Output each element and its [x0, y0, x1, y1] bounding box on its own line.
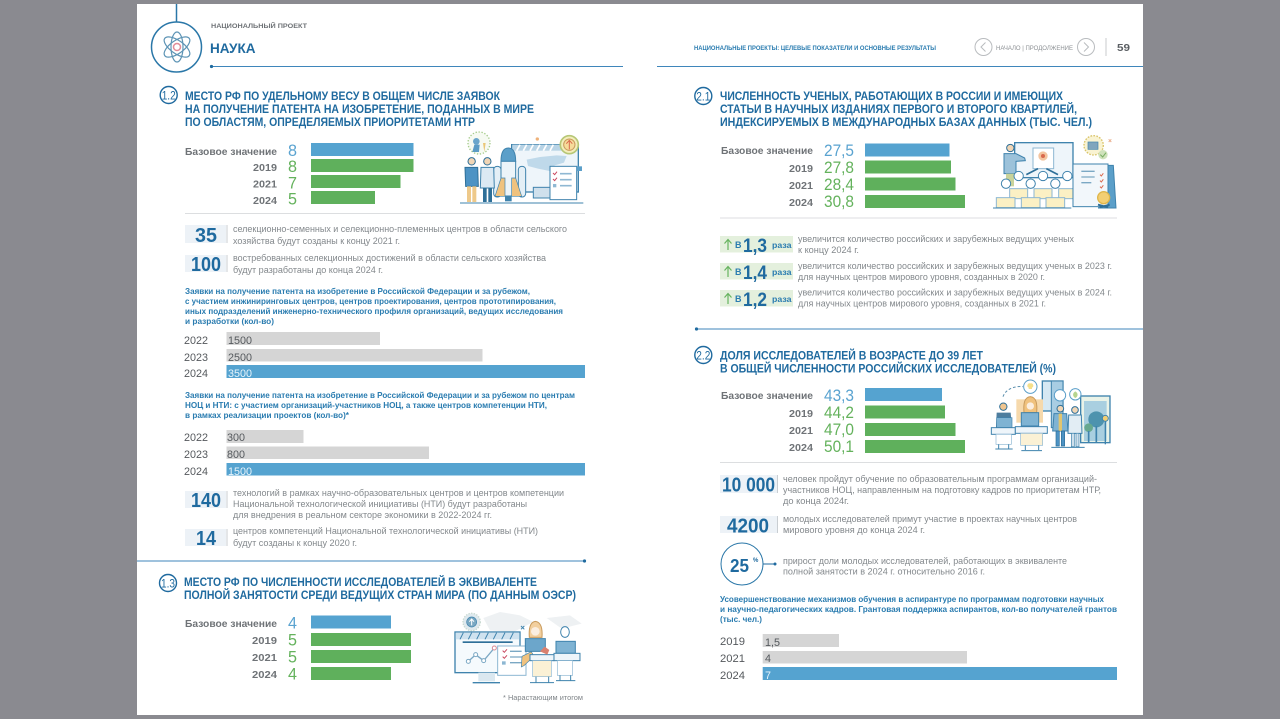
- bar chart: НОЦ and НТИ applications: 1500: [228, 466, 252, 478]
- bar chart: НОЦ and НТИ applications: 2023: [184, 449, 208, 461]
- chart heading: НОЦ and НТИ applications: НОЦ и НТИ: с участием организаций-участников НОЦ, а также центров компетенции НТИ,: [185, 400, 547, 410]
- callout: 35 centers: хозяйства будут созданы к концу 2021 г.: [233, 236, 400, 246]
- callout: 4200 young researchers: 4200: [727, 516, 769, 538]
- callout: 1.4 times: В: [735, 267, 742, 277]
- callout: 140 technologies: Национальной технологической инициативы (НТИ) будут разработаны: [233, 499, 527, 509]
- bar chart: section 1.2: 2021: [253, 178, 277, 190]
- bar chart: patent applications: 3500: [228, 368, 252, 380]
- callout: 100 achievements: [185, 253, 546, 276]
- bar chart: section 2.2: 2024: [789, 442, 813, 454]
- bar chart: section 2.2: 2019: [789, 408, 813, 420]
- callout: 1.4 times: 1,4: [743, 262, 767, 284]
- project title: НАУКА: [210, 40, 256, 56]
- bar chart: section 2.2: [721, 386, 965, 456]
- bar chart: postgraduate grants: [720, 634, 1117, 682]
- section 1.2 heading: [160, 86, 534, 129]
- illustration: rocket, scientists and monitor: [460, 132, 583, 203]
- chart heading: НОЦ and НТИ applications: Заявки на получение патента на изобретение в Российской Федерации и за рубежом по центрам: [185, 390, 575, 400]
- chart heading: patent applications: с участием инжиниринговых центров, центров проектирования, центров прототипирования,: [185, 296, 556, 306]
- callout: 14 competence centers: будут созданы к концу 2020 г.: [233, 538, 357, 548]
- callout: 1.4 times: для научных центров мирового уровня, созданных в 2020 г.: [798, 272, 1045, 282]
- chart heading: postgraduate grants: и научно-педагогических кадров. Грантовая поддержка аспирантов, кол-во получателей грантов: [720, 604, 1117, 614]
- section 2.1 heading: ЧИСЛЕННОСТЬ УЧЕНЫХ, РАБОТАЮЩИХ В РОССИИ И ИМЕЮЩИХ: [720, 91, 1063, 103]
- bar chart: section 2.1: 30,8: [824, 192, 854, 211]
- callout: 4200 young researchers: [720, 514, 1077, 538]
- callout: 1.2 times: для научных центров мирового уровня, созданных в 2021 г.: [798, 298, 1046, 308]
- bar chart: section 2.1: [721, 141, 965, 211]
- bar chart: patent applications: 2022: [184, 335, 208, 347]
- callout: 1.3 times: В: [735, 240, 742, 250]
- bar chart: postgraduate grants: 1,5: [765, 637, 780, 649]
- section 1.2 heading: ПО ОБЛАСТЯМ, ОПРЕДЕЛЯЕМЫХ ПРИОРИТЕТАМИ НТР: [185, 117, 475, 129]
- bar chart: НОЦ and НТИ applications: 2024: [184, 466, 208, 478]
- callout: 1.2 times: 1,2: [743, 289, 767, 311]
- chart heading: postgraduate grants: (тыс. чел.): [720, 614, 762, 624]
- callout: 1.3 times: к концу 2024 г.: [798, 245, 859, 255]
- callout: 1.4 times: раза: [772, 267, 792, 277]
- bar chart: section 2.2: 44,2: [824, 403, 854, 422]
- icon: up arrow: [724, 240, 732, 250]
- bar chart: section 1.3: 4: [288, 664, 297, 684]
- section 1.3 heading: МЕСТО РФ ПО ЧИСЛЕННОСТИ ИССЛЕДОВАТЕЛЕЙ В ЭКВИВАЛЕНТЕ: [184, 576, 537, 589]
- section 1.3 heading: 1.3: [161, 576, 175, 590]
- callout: 4200 young researchers: мирового уровня до конца 2024 г.: [783, 525, 925, 535]
- section 2.1 heading: СТАТЬИ В НАУЧНЫХ ИЗДАНИЯХ ПЕРВОГО И ВТОРОГО КВАРТИЛЕЙ,: [720, 103, 1077, 116]
- bar chart: section 1.3: 2019: [252, 635, 277, 647]
- callout: 1.3 times: [720, 234, 1074, 257]
- bar chart: section 2.1: 2024: [789, 197, 813, 209]
- section 2.2 heading: ДОЛЯ ИССЛЕДОВАТЕЛЕЙ В ВОЗРАСТЕ ДО 39 ЛЕТ: [720, 350, 983, 362]
- callout: 1.4 times: увеличится количество российских и зарубежных ведущих ученых в 2023 г.: [798, 261, 1112, 271]
- icon: back arrow: [975, 38, 992, 56]
- bar chart: section 2.1: 28,4: [824, 175, 854, 194]
- bar chart: section 2.2: 47,0: [824, 420, 854, 439]
- header label: НАЦИОНАЛЬНЫЙ ПРОЕКТ: [211, 21, 307, 30]
- bar chart: section 1.2: [185, 141, 414, 208]
- chart heading: patent applications: и разработки (кол-во): [185, 316, 274, 326]
- chart heading: patent applications: [185, 286, 563, 326]
- bar chart: section 1.3: 2021: [252, 652, 277, 664]
- bar chart: postgraduate grants: 2019: [720, 636, 745, 648]
- section 2.2 heading: 2.2: [696, 348, 711, 362]
- callout: 1.2 times: увеличится количество российских и зарубежных ведущих ученых в 2024 г.: [798, 288, 1112, 298]
- bar chart: postgraduate grants: 7: [765, 670, 771, 682]
- section 2.2 heading: В ОБЩЕЙ ЧИСЛЕННОСТИ РОССИЙСКИХ ИССЛЕДОВАТЕЛЕЙ (%): [720, 362, 1056, 376]
- bar chart: section 1.2: 2019: [253, 162, 277, 174]
- callout: 140 technologies: технологий в рамках научно-образовательных центров и центров компетенции: [233, 488, 564, 498]
- illustration: young researchers at laptops: [991, 380, 1110, 451]
- callout: 25 percent growth: полной занятости в 2024 г. относительно 2016 г.: [783, 566, 985, 576]
- callout: 35 centers: 35: [195, 225, 217, 247]
- callout: 140 technologies: [185, 488, 564, 520]
- right page header: [657, 38, 1143, 66]
- bar chart: section 1.2: 2024: [253, 195, 277, 207]
- bar chart: НОЦ and НТИ applications: 300: [227, 432, 245, 444]
- callout: 14 competence centers: центров компетенций Национальной технологической инициативы (НТИ): [233, 526, 538, 536]
- bar chart: section 1.2: 8: [288, 141, 297, 160]
- callout: 100 achievements: востребованных селекционных достижений в области сельского хозяйства: [233, 253, 546, 263]
- bar chart: postgraduate grants: 4: [765, 653, 771, 665]
- chart heading: patent applications: Заявки на получение патента на изобретение в Российской Федерации и за рубежом,: [185, 286, 530, 296]
- bar chart: section 1.3: 5: [288, 630, 297, 650]
- navigation label: НАЧАЛО | ПРОДОЛЖЕНИЕ: [996, 46, 1073, 52]
- bar chart: patent applications: 1500: [228, 335, 252, 347]
- illustration: lecture with audience and certificate: [993, 136, 1116, 208]
- bar chart: postgraduate grants: 2021: [720, 653, 745, 665]
- bar chart: section 1.3: 2024: [252, 669, 277, 681]
- callout: 140 technologies: для внедрения в реальном секторе экономики в 2022-2024 гг.: [233, 510, 492, 520]
- callout: 1.4 times: [720, 261, 1112, 284]
- left page header: [152, 4, 623, 72]
- callout: 100 achievements: будут разработаны до конца 2024 г.: [233, 265, 383, 275]
- bar chart: section 1.2: 7: [288, 174, 297, 192]
- icon: up arrow: [724, 266, 732, 277]
- bar chart: НОЦ and НТИ applications: [184, 430, 585, 478]
- chart heading: postgraduate grants: Усовершенствование механизмов обучения в аспирантуре по программам подготовки научных: [720, 594, 1104, 604]
- bar chart: НОЦ and НТИ applications: 800: [227, 449, 245, 461]
- section 2.1 heading: ИНДЕКСИРУЕМЫХ В МЕЖДУНАРОДНЫХ БАЗАХ ДАННЫХ (ТЫС. ЧЕЛ.): [720, 117, 1092, 129]
- callout: 1.2 times: [720, 288, 1112, 311]
- page sheet: [137, 4, 1143, 715]
- bar chart: section 1.3: 4: [288, 614, 297, 632]
- icon: up arrow: [724, 294, 732, 304]
- callout: 100 achievements: 100: [191, 254, 221, 276]
- bar chart: section 2.2: 43,3: [824, 386, 854, 405]
- bar chart: section 1.2: 8: [288, 157, 297, 176]
- bar chart: section 2.1: 2021: [789, 180, 813, 192]
- callout: 14 competence centers: 14: [196, 528, 217, 550]
- chart heading: НОЦ and НТИ applications: [185, 390, 575, 420]
- section 1.2 heading: МЕСТО РФ ПО УДЕЛЬНОМУ ВЕСУ В ОБЩЕМ ЧИСЛЕ ЗАЯВОК: [185, 91, 501, 103]
- bar chart: section 2.2: 50,1: [824, 437, 854, 456]
- section 1.2 heading: 1.2: [162, 88, 176, 102]
- callout: 35 centers: селекционно-семенных и селекционно-племенных центров в области сельского: [233, 224, 567, 234]
- illustration: analyst at monitor with colleagues: [455, 612, 582, 683]
- callout: 25 percent growth: 25: [730, 556, 749, 576]
- callout: 10 000 people: [720, 474, 1101, 506]
- section 2.2 heading: [695, 346, 1056, 376]
- bar chart: section 1.2: Базовое значение: [185, 146, 277, 158]
- bar chart: patent applications: 2024: [184, 368, 208, 380]
- callout: 10 000 people: участников НОЦ, направленным на подготовку кадров по приоритетам НТР,: [783, 485, 1101, 495]
- bar chart: section 1.2: 5: [288, 190, 297, 208]
- bar chart: postgraduate grants: 2024: [720, 670, 745, 682]
- bar chart: section 2.2: Базовое значение: [721, 390, 813, 402]
- callout: 1.3 times: раза: [772, 240, 792, 250]
- section 2.1 heading: 2.1: [696, 89, 711, 103]
- bar chart: section 2.1: 27,8: [824, 158, 854, 177]
- callout: 1.3 times: увеличится количество российских и зарубежных ведущих ученых: [798, 234, 1074, 244]
- chart heading: patent applications: иных подразделений инженерно-технического профиля организаций, ведущих исследования: [185, 306, 563, 316]
- bar chart: section 2.1: 27,5: [824, 141, 854, 160]
- bar chart: section 2.1: 2019: [789, 163, 813, 175]
- callout: 10 000 people: 10 000: [722, 474, 775, 496]
- bar chart: section 2.2: 2021: [789, 425, 813, 437]
- callout: 14 competence centers: [185, 526, 538, 550]
- section 1.2 heading: НА ПОЛУЧЕНИЕ ПАТЕНТА НА ИЗОБРЕТЕНИЕ, ПОДАННЫХ В МИРЕ: [185, 104, 534, 116]
- section 1.3 heading: ПОЛНОЙ ЗАНЯТОСТИ СРЕДИ ВЕДУЩИХ СТРАН МИРА (ПО ДАННЫМ ОЭСР): [184, 589, 576, 602]
- icon: forward arrow: [1078, 38, 1094, 56]
- callout: 10 000 people: до конца 2024г.: [783, 496, 849, 506]
- callout: 1.3 times: 1,3: [743, 235, 767, 257]
- bar chart: patent applications: 2500: [228, 352, 252, 364]
- callout: 25 percent growth: %: [753, 558, 759, 564]
- chart heading: НОЦ and НТИ applications: в рамках реализации проектов (кол-во)*: [185, 410, 350, 420]
- footnote: * Нарастающим итогом: [503, 695, 583, 702]
- callout: 35 centers: [185, 224, 567, 247]
- callout: 1.2 times: раза: [772, 294, 792, 304]
- callout: 25 percent growth: прирост доли молодых исследователей, работающих в эквиваленте: [783, 556, 1067, 566]
- bar chart: section 1.3: Базовое значение: [185, 618, 277, 630]
- callout: 140 technologies: 140: [191, 490, 221, 512]
- callout: 1.2 times: В: [735, 294, 742, 304]
- chart heading: postgraduate grants: [720, 594, 1117, 624]
- bar chart: section 1.3: 5: [288, 648, 297, 666]
- icon: atom in circle: [152, 22, 202, 72]
- callout: 25 percent growth: [721, 543, 1067, 585]
- bar chart: patent applications: [184, 332, 585, 380]
- page number: 59: [1117, 42, 1130, 54]
- callout: 10 000 people: человек пройдут обучение по образовательным программам организаций-: [783, 474, 1097, 484]
- bar chart: section 1.3: [185, 614, 411, 684]
- section 1.3 heading: [160, 574, 576, 602]
- bar chart: section 2.1: Базовое значение: [721, 145, 813, 157]
- running title: НАЦИОНАЛЬНЫЕ ПРОЕКТЫ: ЦЕЛЕВЫЕ ПОКАЗАТЕЛИ И ОСНОВНЫЕ РЕЗУЛЬТАТЫ: [694, 46, 936, 52]
- callout: 4200 young researchers: молодых исследователей примут участие в проектах научных центров: [783, 514, 1077, 524]
- bar chart: НОЦ and НТИ applications: 2022: [184, 432, 208, 444]
- bar chart: patent applications: 2023: [184, 352, 208, 364]
- section 2.1 heading: [695, 88, 1092, 129]
